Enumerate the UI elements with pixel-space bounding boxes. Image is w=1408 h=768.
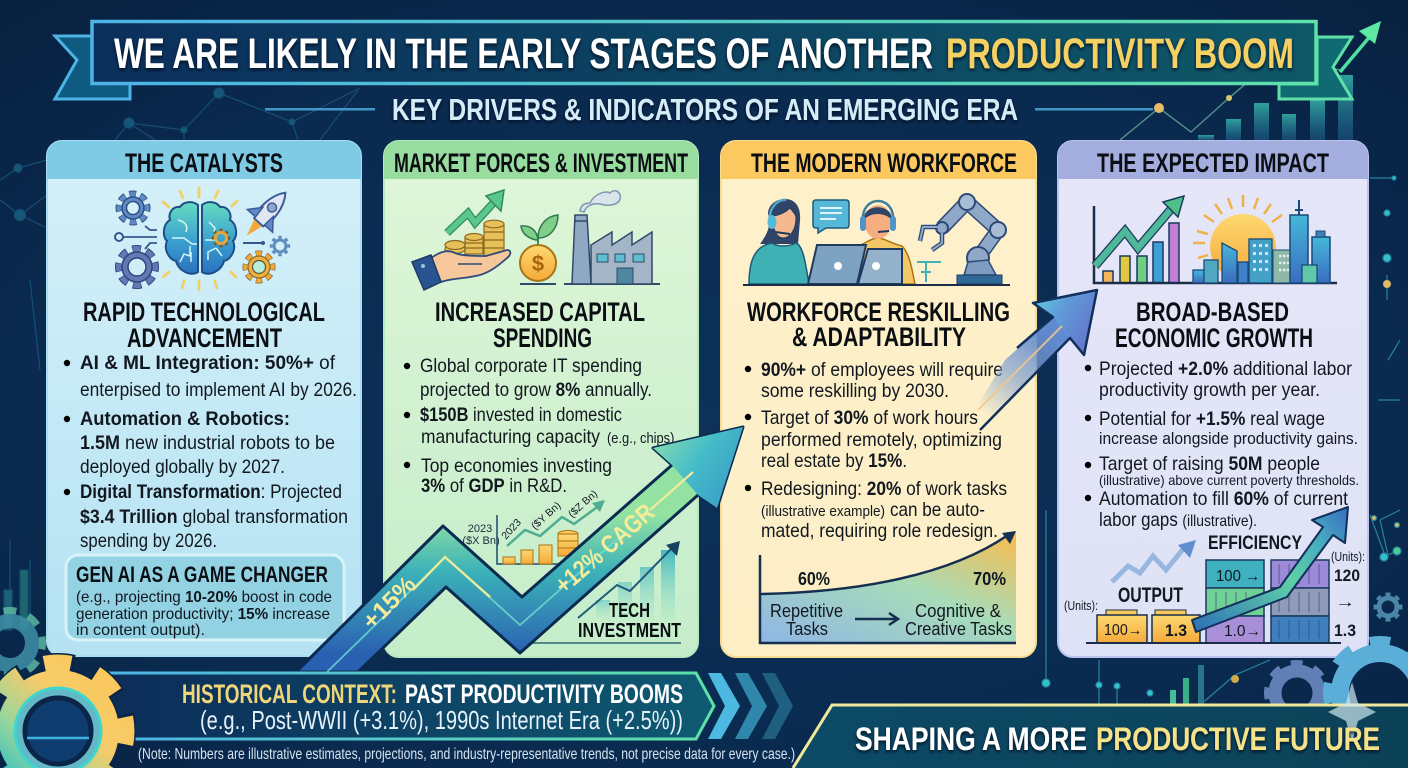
chart: output and efficiency: OUTPUT (1118, 584, 1183, 607)
chevrons (708, 673, 793, 739)
bullet list: Target of raising 50M people (1099, 453, 1320, 475)
mini chart: investment: 2023 (499, 516, 524, 542)
bullet list (745, 359, 1007, 542)
chart: repetitive to cognitive tasks (760, 531, 1016, 643)
icon: brain with gears and rocket (115, 181, 298, 290)
banner: historical context: HISTORICAL CONTEXT: (182, 679, 397, 709)
subheading: ECONOMIC GROWTH (1115, 323, 1313, 353)
banner: historical context: PAST PRODUCTIVITY BOOMS (405, 679, 683, 709)
chart: output and efficiency: EFFICIENCY (1208, 533, 1302, 554)
bullet list: (illustrative) above current poverty thresholds. (1099, 472, 1359, 488)
bullet list: $150B invested in domestic (420, 404, 622, 426)
bullet list: Global corporate IT spending (420, 355, 642, 377)
subheading: SPENDING (493, 323, 592, 353)
bullet list: Redesigning: 20% of work tasks (761, 478, 1007, 500)
bullet list: Automation to fill 60% of current (1099, 488, 1349, 510)
chart: output and efficiency: 100→ (1104, 622, 1142, 639)
chart: output and efficiency (1064, 533, 1365, 643)
chart: output and efficiency: 1.0→ (1224, 623, 1261, 640)
chart: output and efficiency: 1.3 (1165, 621, 1187, 640)
panel: modern workforce (721, 141, 1036, 657)
panel: market forces (384, 141, 698, 657)
arrow: output to efficiency (1192, 507, 1348, 632)
bullet list: deployed globally by 2027. (80, 456, 285, 478)
bullet list: AI & ML Integration: 50%+ of (80, 352, 336, 374)
heading: THE MODERN WORKFORCE (751, 148, 1017, 178)
bullet list: increase alongside productivity gains. (1099, 429, 1358, 448)
bullet list: Automation & Robotics: (80, 408, 290, 430)
bullet list: Target of 30% of work hours (761, 407, 978, 429)
chart: output and efficiency: 1.3 (1334, 621, 1356, 640)
icon: capital hand, coin plant, factory (412, 190, 660, 290)
callout: gen AI: in content output). (76, 622, 205, 639)
bullet list: productivity growth per year. (1099, 379, 1320, 401)
bullet list: spending by 2026. (80, 530, 217, 552)
banner: historical context: (e.g., Post-WWII (+3.1%), 1990s Internet Era (+2.5%)) (200, 705, 683, 735)
banner: future: SHAPING A MORE (855, 721, 1087, 757)
bullet list: 90%+ of employees will require (761, 359, 1003, 381)
icon: large gear (0, 663, 126, 768)
title text: PRODUCTIVITY BOOM (946, 30, 1294, 78)
chart: output and efficiency: → (1335, 594, 1355, 611)
mini chart: investment: 2023 (468, 523, 492, 535)
subheading (435, 297, 645, 353)
decorative chart right (1120, 60, 1353, 141)
decorative network left (0, 88, 360, 630)
panel: the catalysts (47, 141, 361, 656)
bullet list: manufacturing capacity (421, 426, 600, 448)
chart: repetitive to cognitive tasks: 70% (973, 569, 1006, 589)
bullet list: Potential for +1.5% real wage (1099, 408, 1325, 430)
bullet list: real estate by 15%. (761, 450, 907, 472)
subtitle: KEY DRIVERS & INDICATORS OF AN EMERGING ERA (392, 92, 1018, 127)
bullet list: $3.4 Trillion global transformation (80, 506, 348, 528)
callout: gen AI: GEN AI AS A GAME CHANGER (76, 562, 328, 587)
heading: THE CATALYSTS (125, 148, 283, 178)
tech investment chart: INVESTMENT (578, 620, 681, 642)
bullet list (1085, 358, 1359, 531)
bullet list: projected to grow 8% annually. (420, 379, 652, 401)
chart: output and efficiency: 120 (1334, 566, 1360, 585)
mini chart: investment: ($X Bn) (462, 535, 500, 547)
subheading: ADVANCEMENT (127, 323, 282, 353)
bullet list (64, 352, 357, 552)
title banner (55, 22, 1352, 99)
banner: future (793, 682, 1408, 768)
subheading: BROAD-BASED (1136, 297, 1289, 327)
subheading (747, 297, 1010, 352)
chart: repetitive to cognitive tasks: Cognitive & (915, 601, 1001, 621)
bullet list: Top economies investing (421, 455, 612, 477)
mini chart: investment: ($Y Bn) (529, 500, 563, 532)
bullet list: 1.5M new industrial robots to be (80, 432, 335, 454)
label: +15%: +15% (357, 571, 421, 635)
bullet list: 3% of GDP in R&D. (421, 475, 567, 497)
mini chart: investment (462, 488, 605, 564)
bullet list: enterpised to implement AI by 2026. (80, 379, 357, 401)
bullet list: Digital Transformation: Projected (80, 481, 342, 503)
bullet list: Projected +2.0% additional labor (1099, 358, 1352, 380)
mini chart: investment: ($Z Bn) (566, 488, 600, 520)
label: +12% CAGR: +12% CAGR (550, 498, 660, 600)
icon: workers and robot arm (743, 194, 1010, 285)
bullet list: mated, requiring role redesign. (761, 520, 998, 542)
chart: output and efficiency: (Units): (1331, 549, 1365, 564)
panel: expected impact (1058, 141, 1368, 657)
bullet list (404, 355, 678, 497)
bullet list: some reskilling by 2030. (761, 380, 949, 402)
subheading (1115, 297, 1313, 353)
tech investment chart: TECH (609, 600, 650, 622)
callout: gen AI: generation productivity; 15% increase (76, 606, 330, 623)
bullet list: performed remotely, optimizing (761, 429, 1002, 451)
note: (Note: Numbers are illustrative estimates, projections, and industry-representative trends, not precise data for every case.) (138, 746, 795, 763)
decorative gears right (1270, 596, 1408, 743)
subheading: & ADAPTABILITY (792, 322, 966, 352)
bullet list: can be auto- (890, 499, 985, 521)
banner: historical context (100, 673, 793, 739)
heading: MARKET FORCES & INVESTMENT (394, 148, 688, 178)
bullet list: labor gaps (illustrative). (1099, 509, 1257, 531)
icon: growth chart, sun and city (1094, 195, 1337, 283)
icon: capital hand, coin plant, factory: $ (532, 251, 544, 276)
tech investment chart (530, 541, 681, 643)
chart: repetitive to cognitive tasks: Repetitive (770, 601, 843, 621)
decorative dots right (1042, 176, 1401, 705)
callout: gen AI: (e.g., projecting 10-20% boost in code (76, 589, 332, 606)
bullet list: (e.g., chips). (607, 430, 678, 447)
chart: repetitive to cognitive tasks: Tasks (786, 619, 828, 639)
bullet list: (illustrative example) (761, 503, 885, 520)
subheading: INCREASED CAPITAL (435, 297, 645, 327)
chart: repetitive to cognitive tasks: 60% (798, 569, 830, 589)
subheading: RAPID TECHNOLOGICAL (83, 297, 325, 327)
subheading: WORKFORCE RESKILLING (747, 297, 1010, 327)
chart: repetitive to cognitive tasks: Creative Tasks (905, 619, 1012, 639)
arrow: workforce to impact (975, 290, 1097, 430)
chart: output and efficiency: (Units): (1064, 598, 1098, 613)
title text: WE ARE LIKELY IN THE EARLY STAGES OF ANOTHER (114, 30, 933, 78)
top right growth arrow (1340, 21, 1381, 72)
decorative gear left back (0, 613, 40, 673)
chart: output and efficiency: 100 → (1216, 568, 1260, 585)
heading: THE EXPECTED IMPACT (1097, 148, 1329, 178)
subheading (83, 297, 325, 353)
callout: gen AI (66, 555, 344, 640)
arrow: rising capital arrow (296, 427, 743, 672)
